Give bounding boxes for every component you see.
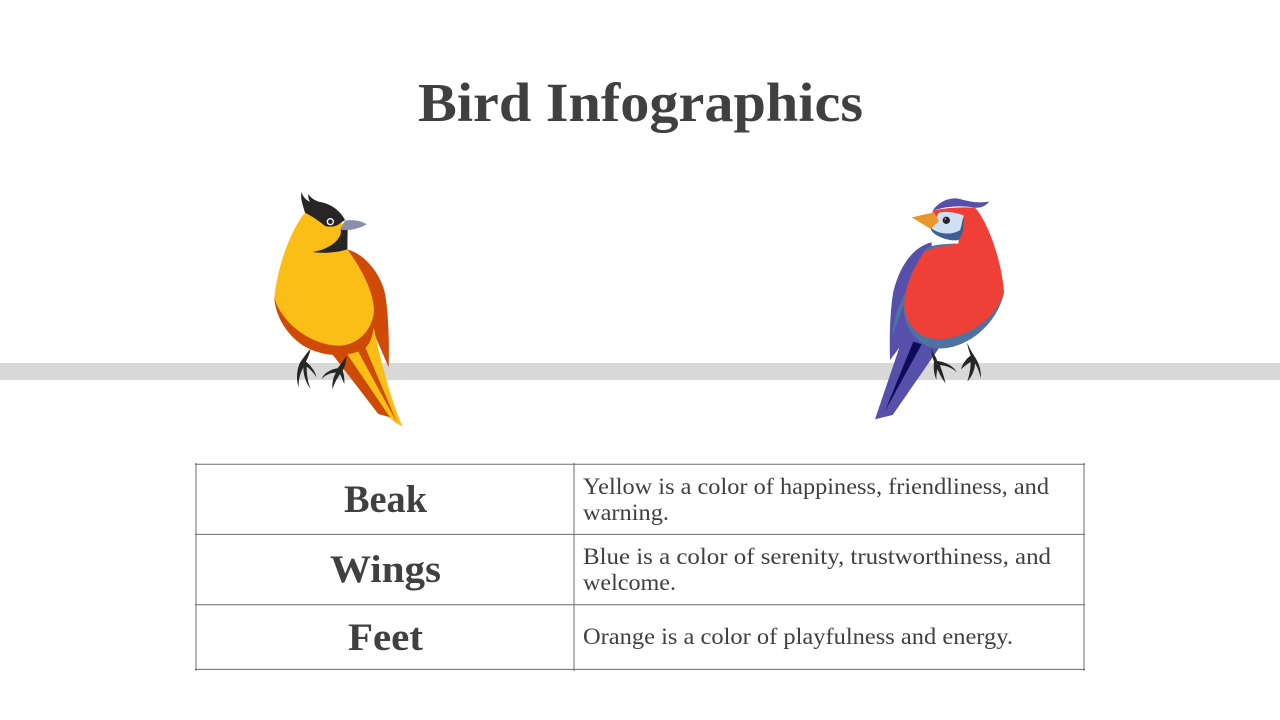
row: wings: Wings xyxy=(330,548,441,591)
row: wings: welcome. xyxy=(583,570,676,596)
icon: yellow bird xyxy=(274,192,403,427)
row: wings xyxy=(330,544,1051,596)
icon: red bird xyxy=(875,198,1004,419)
row: beak: warning. xyxy=(583,500,669,526)
title: Bird Infographics xyxy=(418,72,863,133)
perch wire xyxy=(0,363,1280,380)
row: wings: Blue is a color of serenity, trustworthiness, and xyxy=(583,544,1051,570)
red bird feet xyxy=(931,343,981,383)
row: beak: Beak xyxy=(344,478,427,521)
row: feet: Orange is a color of playfulness and energy. xyxy=(583,624,1013,650)
row: feet: Feet xyxy=(348,616,423,659)
row: beak: Yellow is a color of happiness, friendliness, and xyxy=(583,474,1049,500)
row: feet xyxy=(348,616,1013,659)
row: beak xyxy=(344,474,1049,526)
table xyxy=(195,463,1085,671)
yellow bird feet xyxy=(297,349,347,389)
